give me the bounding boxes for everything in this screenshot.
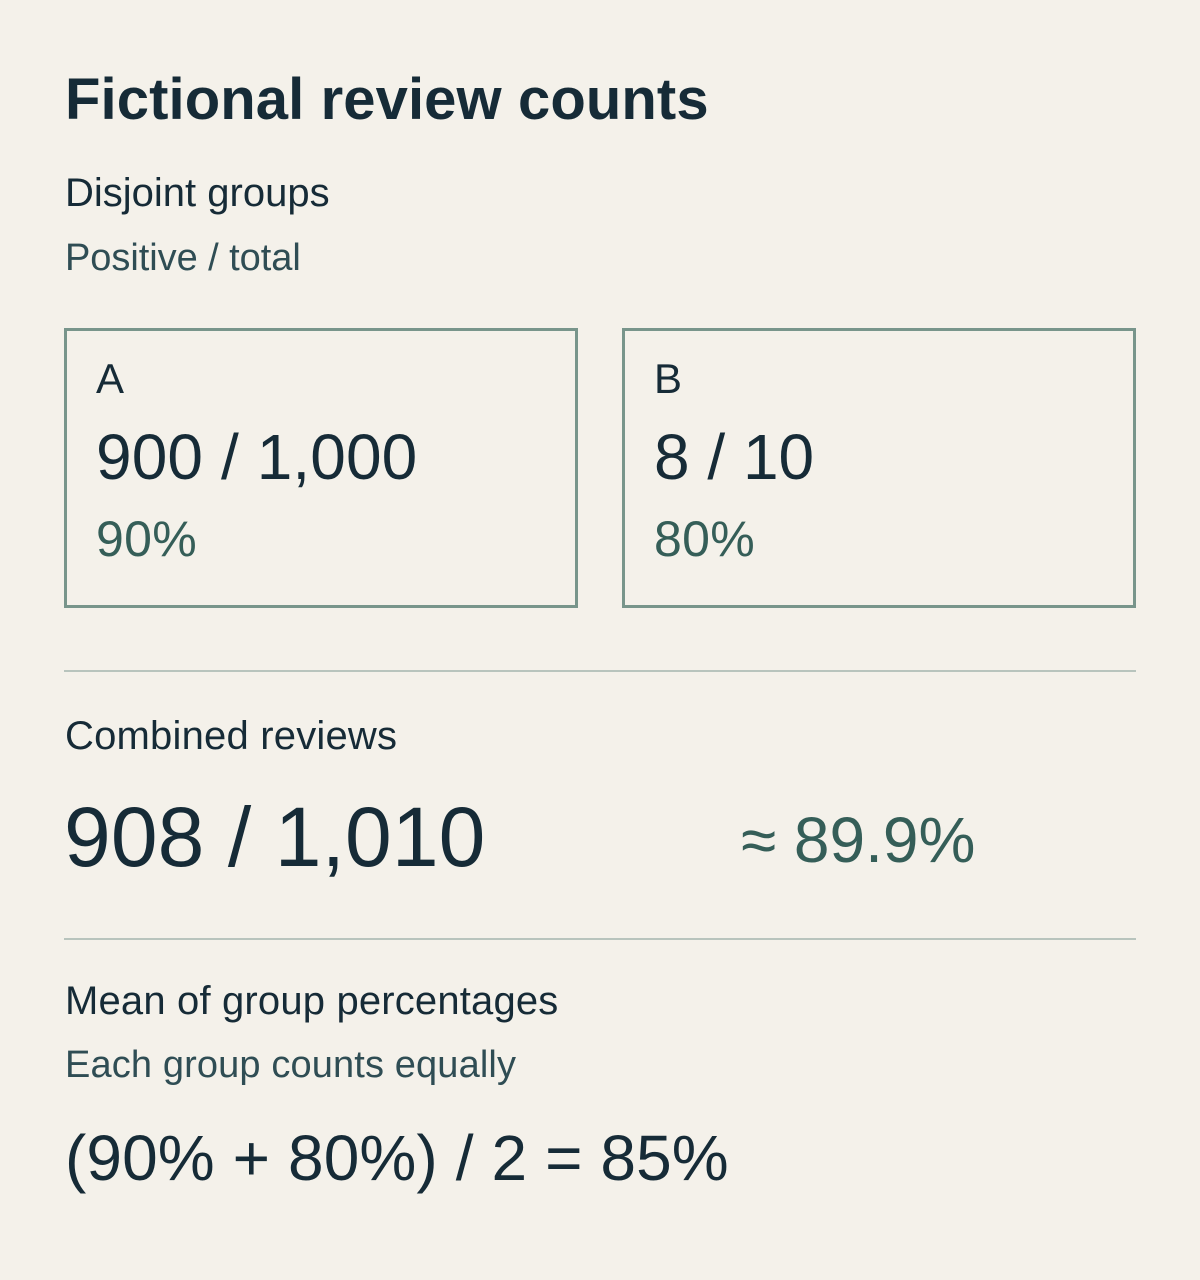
- panel: group A: [64, 328, 578, 608]
- section heading: combined reviews: Combined reviews: [65, 714, 397, 758]
- group A label: A: [96, 355, 124, 402]
- subheading: positive / total: Positive / total: [65, 237, 301, 279]
- group B counts: 8 / 10: [654, 421, 814, 493]
- section heading: mean of group percentages: Mean of group percentages: [65, 979, 558, 1023]
- combined percentage: ≈ 89.9%: [741, 804, 975, 876]
- group B percentage: 80%: [654, 511, 755, 567]
- group A percentage: 90%: [96, 511, 197, 567]
- combined counts: 908 / 1,010: [64, 790, 485, 884]
- subheading: each group counts equally: Each group counts equally: [65, 1044, 516, 1086]
- group A counts: 900 / 1,000: [96, 421, 417, 493]
- section heading: disjoint groups: Disjoint groups: [65, 171, 330, 215]
- panel: group B: [622, 328, 1136, 608]
- mean calculation: (90% + 80%) / 2 = 85%: [65, 1122, 729, 1194]
- title: Fictional review counts: [65, 67, 709, 132]
- group B label: B: [654, 355, 682, 402]
